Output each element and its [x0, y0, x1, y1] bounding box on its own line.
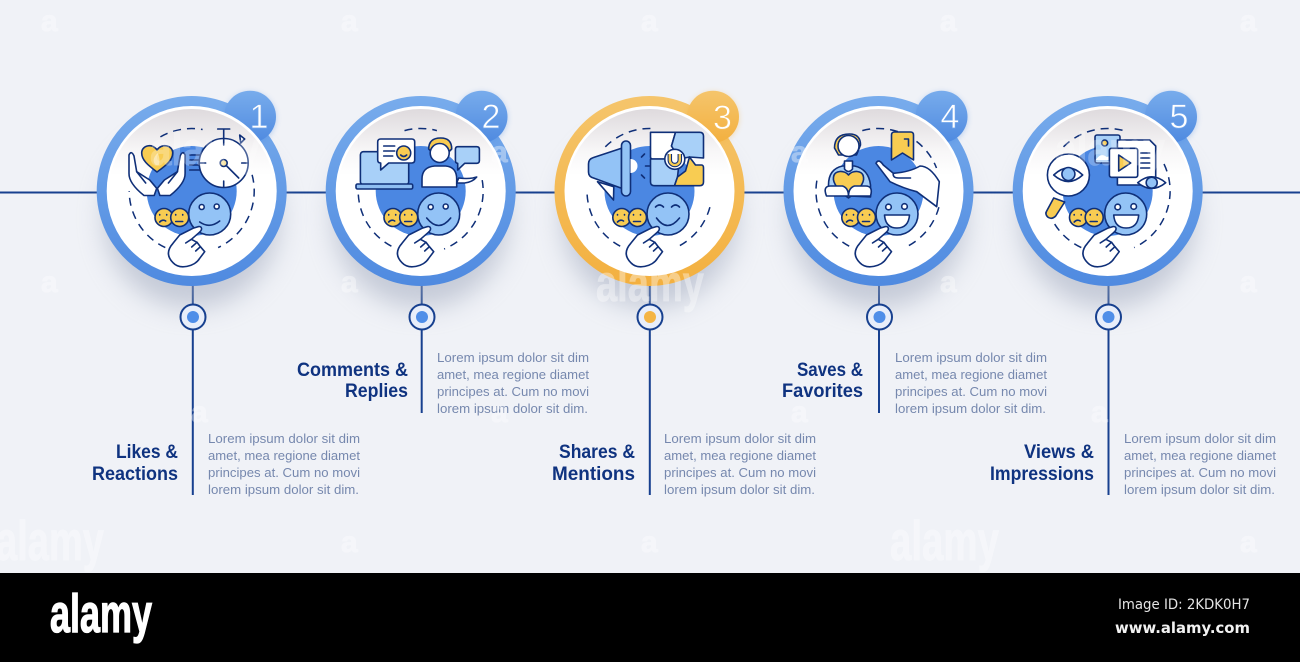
stock watermarks: alamy — [890, 509, 999, 572]
text block 1: principes at. Cum no movi — [208, 465, 360, 480]
connector line 3 — [649, 280, 651, 495]
heading: likes and reactions: Likes & — [116, 442, 178, 463]
image id: Image ID: 2KDK0H7 — [1118, 597, 1250, 613]
text block 2: lorem ipsum dolor sit dim. — [437, 401, 588, 416]
website: www.alamy.com — [1115, 619, 1250, 637]
stock watermarks: a — [1091, 396, 1108, 429]
icon: shares megaphone and puzzle — [587, 128, 710, 267]
heading: views and impressions: Views & — [1024, 442, 1094, 463]
text block 1: lorem ipsum dolor sit dim. — [208, 482, 359, 497]
stock watermarks: a — [940, 5, 957, 38]
icon: saves person heart and bookmark — [816, 129, 939, 267]
connector line 5 — [1108, 280, 1110, 495]
heading: saves and favorites — [782, 360, 863, 402]
stock watermarks: a — [41, 5, 58, 38]
stock watermarks: a — [1240, 266, 1257, 299]
stock watermarks: a — [41, 266, 58, 299]
stock watermarks: a — [341, 5, 358, 38]
stock watermarks: a — [641, 5, 658, 38]
badge and ring 2: 2 — [482, 98, 500, 136]
step 1: likes and reactions — [92, 91, 360, 497]
text block 2: Lorem ipsum dolor sit dim — [437, 350, 589, 365]
text block 5: amet, mea regione diamet — [1124, 448, 1276, 463]
icon: comments laptop and person — [356, 128, 483, 267]
text block 1: Lorem ipsum dolor sit dim — [208, 431, 360, 446]
connector line 2 — [421, 280, 423, 413]
horizontal timeline — [0, 192, 1300, 194]
connector line 1 — [192, 280, 194, 495]
footer logo: alamy — [50, 584, 152, 644]
heading: views and impressions — [990, 442, 1094, 485]
text block 3: amet, mea regione diamet — [664, 448, 816, 463]
text block 5 — [1124, 431, 1276, 497]
text block 3: lorem ipsum dolor sit dim. — [664, 482, 815, 497]
badge and ring 1 — [97, 91, 287, 308]
stock watermarks: a — [641, 526, 658, 559]
text block 3 — [664, 431, 816, 497]
text block 1: amet, mea regione diamet — [208, 448, 360, 463]
stock watermarks: alamy — [596, 255, 704, 313]
node 2 — [410, 304, 434, 330]
text block 2: principes at. Cum no movi — [437, 384, 589, 399]
stock watermarks: a — [341, 266, 358, 299]
stock watermarks: alamy — [150, 123, 260, 175]
badge and ring 2 — [326, 91, 516, 308]
icon: views magnifier and media — [1046, 128, 1170, 267]
badge and ring 5 — [1013, 91, 1203, 308]
stock watermarks: a — [791, 136, 808, 169]
text block 2: amet, mea regione diamet — [437, 367, 589, 382]
badge and ring 3: 3 — [713, 99, 732, 137]
node 3 — [638, 304, 662, 330]
heading: comments and replies: Replies — [345, 381, 408, 402]
badge and ring 1: 1 — [250, 98, 268, 136]
node 5 — [1096, 304, 1121, 330]
heading: likes and reactions: Reactions — [92, 464, 178, 485]
heading: likes and reactions — [92, 442, 178, 485]
step 2: comments and replies — [297, 91, 589, 416]
text block 2 — [437, 350, 589, 416]
step 5: views and impressions — [990, 91, 1276, 497]
heading: saves and favorites: Saves & — [797, 360, 863, 381]
text block 3: Lorem ipsum dolor sit dim — [664, 431, 816, 446]
text block 5: Lorem ipsum dolor sit dim — [1124, 431, 1276, 446]
text block 4: Lorem ipsum dolor sit dim — [895, 350, 1047, 365]
footer bar — [0, 573, 1300, 662]
text block 4: amet, mea regione diamet — [895, 367, 1047, 382]
icon: likes stopwatch and faces — [129, 129, 254, 267]
badge and ring 3 — [554, 91, 744, 308]
heading: saves and favorites: Favorites — [782, 381, 863, 402]
stock watermarks: alamy — [0, 509, 104, 572]
text block 5: principes at. Cum no movi — [1124, 465, 1276, 480]
heading: shares and mentions: Shares & — [559, 442, 635, 463]
text block 1 — [208, 431, 360, 497]
text block 5: lorem ipsum dolor sit dim. — [1124, 482, 1275, 497]
badge and ring 4 — [784, 91, 974, 308]
stock watermarks: a — [1240, 526, 1257, 559]
stock watermarks: a — [940, 266, 957, 299]
badge and ring 5: 5 — [1170, 98, 1188, 136]
stock watermarks: a — [341, 526, 358, 559]
heading: views and impressions: Impressions — [990, 464, 1094, 485]
stock watermarks: alamy — [1055, 123, 1165, 175]
heading: shares and mentions — [552, 442, 635, 485]
badge and ring 4: 4 — [941, 98, 959, 136]
text block 4: lorem ipsum dolor sit dim. — [895, 401, 1046, 416]
text block 4 — [895, 350, 1047, 416]
node 4 — [867, 304, 892, 330]
stock watermarks: a — [491, 136, 508, 169]
step 3: shares and mentions — [552, 91, 816, 497]
text block 4: principes at. Cum no movi — [895, 384, 1047, 399]
node 1 — [180, 304, 206, 330]
text block 3: principes at. Cum no movi — [664, 465, 816, 480]
heading: shares and mentions: Mentions — [552, 464, 635, 485]
step 4: saves and favorites — [782, 91, 1047, 416]
connector line 4 — [878, 280, 880, 413]
stock watermarks: a — [1240, 5, 1257, 38]
stock watermarks: a — [791, 396, 808, 429]
heading: comments and replies — [297, 360, 408, 402]
stock watermarks: a — [191, 396, 208, 429]
heading: comments and replies: Comments & — [297, 360, 408, 381]
stock watermarks: a — [491, 396, 508, 429]
